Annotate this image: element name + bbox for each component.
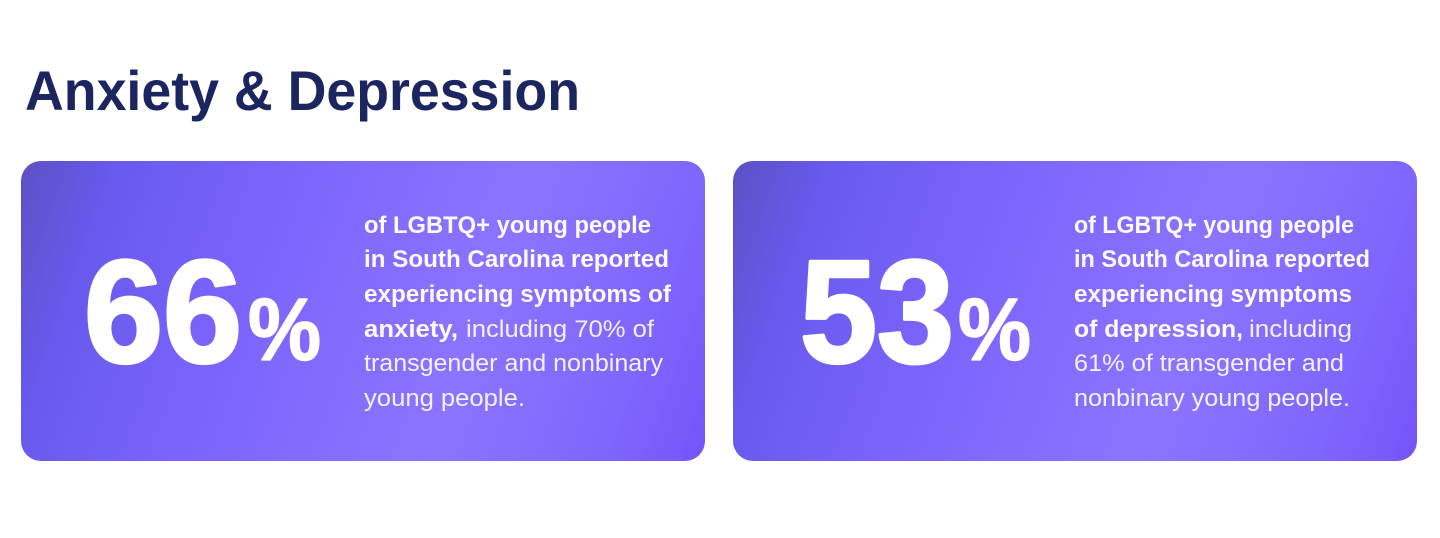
statistic: 66%: 66 — [84, 230, 242, 393]
panel: anxiety — [21, 161, 705, 461]
statistic: 66% — [84, 230, 321, 393]
statistic: 53%: 53 — [800, 230, 954, 393]
statistic: 53%: % — [958, 280, 1031, 379]
text block: depression description: including — [1249, 316, 1352, 343]
text block: anxiety description — [364, 212, 672, 412]
text block: depression description: in South Carolina reported — [1074, 246, 1370, 273]
text block: anxiety description: young people. — [364, 385, 525, 412]
statistic: 66%: % — [248, 280, 321, 379]
text block: depression description — [1074, 212, 1370, 412]
title: Anxiety & Depression — [25, 59, 580, 122]
text block: depression description: nonbinary young people. — [1074, 385, 1350, 412]
panel background — [21, 161, 705, 461]
text block: depression description: of depression, — [1074, 316, 1243, 343]
text block: anxiety description: experiencing symptoms of — [364, 281, 672, 308]
text block: anxiety description: anxiety, — [364, 316, 458, 343]
panel background — [733, 161, 1417, 461]
text block: anxiety description: including 70% of — [466, 316, 654, 343]
text block: depression description: experiencing symptoms — [1074, 281, 1352, 308]
text block: anxiety description: in South Carolina reported — [364, 246, 669, 273]
panel: depression — [733, 161, 1417, 461]
text block: depression description: 61% of transgender and — [1074, 350, 1344, 377]
text block: depression description: of LGBTQ+ young people — [1074, 212, 1354, 239]
text block: anxiety description: of LGBTQ+ young people — [364, 212, 651, 239]
text block: anxiety description: transgender and nonbinary — [364, 350, 663, 377]
